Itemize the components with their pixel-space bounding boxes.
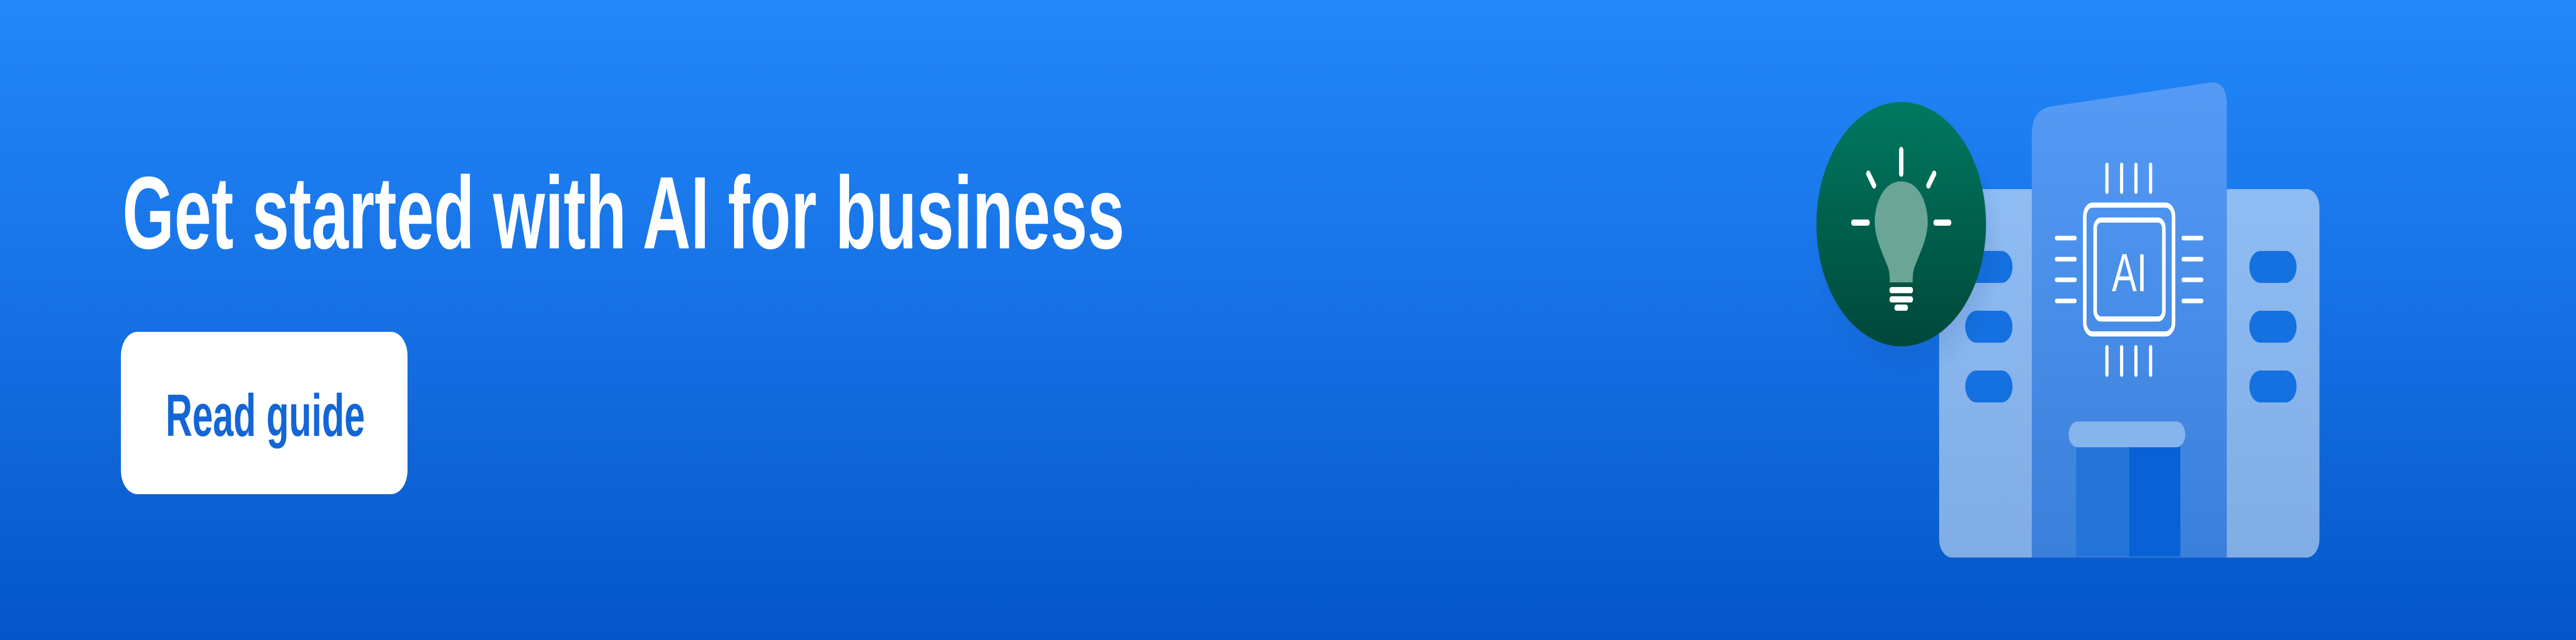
illustration: AI building with lightbulb xyxy=(1810,82,2319,558)
building xyxy=(1939,82,2319,558)
button: read guide xyxy=(121,332,408,494)
icon: lightbulb circle xyxy=(1810,102,2004,381)
button label: Read guide xyxy=(166,383,365,449)
icon: AI chip: AI xyxy=(2112,243,2147,302)
icon: AI chip xyxy=(2057,165,2202,375)
title: Get started with AI for business xyxy=(123,156,1125,271)
